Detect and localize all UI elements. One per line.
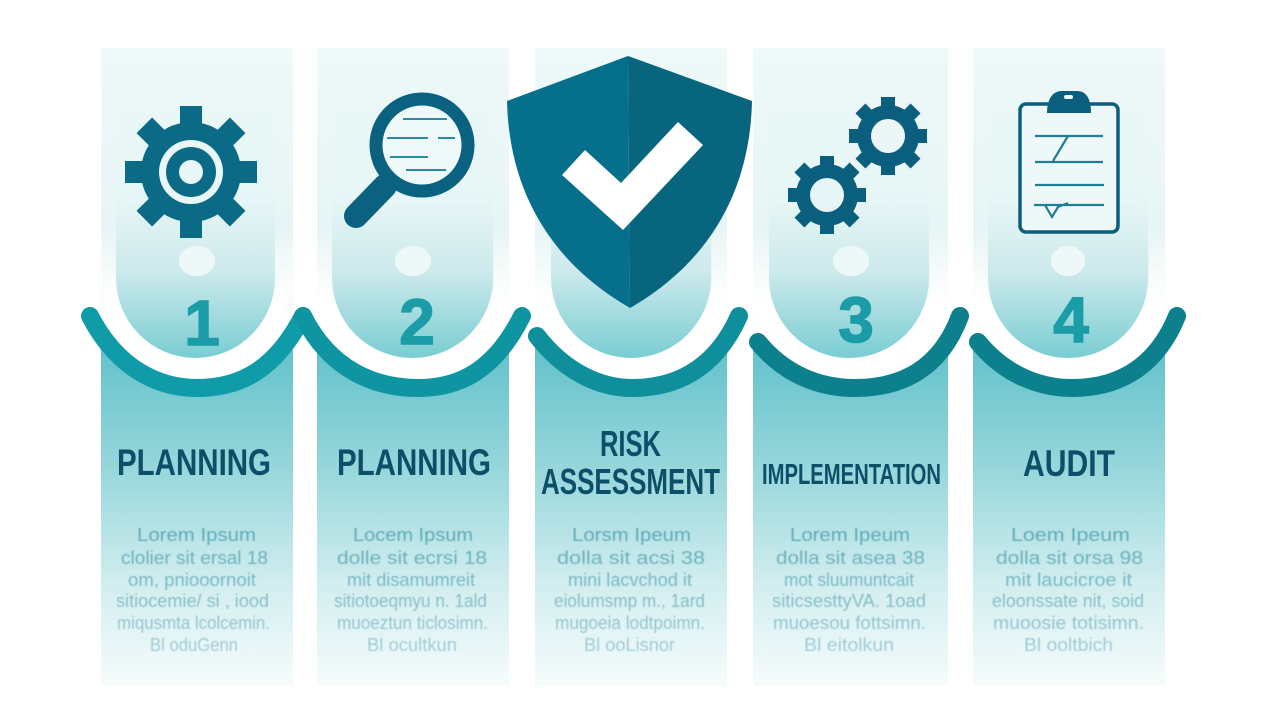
heading: risk assessment	[541, 423, 720, 502]
body text 1	[116, 525, 270, 655]
body text 3: mugoeia lodtpoimn.	[555, 613, 705, 633]
panel: step 5 audit	[973, 48, 1165, 686]
body text 1: sitiocemie/ si , iood	[116, 591, 269, 611]
panel: step 2 planning	[317, 48, 509, 686]
dot 3	[833, 246, 869, 276]
body text 5: dolla sit orsa 98	[996, 548, 1143, 568]
inner capsule 4	[769, 48, 929, 358]
body text 2: sitiotoeqmyu n. 1ald	[334, 591, 487, 611]
icon: two gears	[788, 97, 927, 234]
body text 1: clolier sit ersal 18	[121, 548, 268, 568]
icon: magnifying glass	[356, 99, 468, 216]
body text 4	[772, 525, 926, 655]
dot 4	[1051, 246, 1085, 276]
body text 3: Lorsm Ipeum	[572, 525, 691, 545]
body text 3	[554, 525, 705, 655]
number 2: 2	[399, 286, 435, 358]
heading: planning: PLANNING	[337, 442, 491, 483]
number 3: 3	[838, 284, 874, 356]
body text 4: Bl eitolkun	[804, 635, 894, 655]
body text 1: miqusmta lcolcemin.	[117, 613, 270, 633]
heading: risk assessment: ASSESSMENT	[541, 461, 720, 502]
panel: step 1 planning	[101, 48, 293, 686]
body text 1: Bl oduGenn	[150, 635, 238, 655]
body text 3: mini lacvchod it	[568, 570, 692, 590]
dot 2	[395, 246, 431, 276]
body text 2: dolle sit ecrsi 18	[337, 548, 487, 568]
heading: audit: AUDIT	[1023, 443, 1115, 484]
icon: gear	[125, 106, 257, 238]
body text 3: Bl ooLisnor	[584, 635, 675, 655]
inner capsule 3	[551, 48, 711, 358]
panel: step 4 implementation	[753, 48, 948, 686]
inner capsule 5	[988, 48, 1148, 358]
icon: clipboard	[1020, 91, 1118, 232]
body text 1: Lorem Ipsum	[137, 525, 256, 545]
heading: risk assessment: RISK	[600, 423, 661, 464]
panel: step 3 risk assessment	[535, 48, 727, 686]
body text 4: mot sluumuntcait	[784, 570, 914, 590]
inner capsule 1	[116, 48, 275, 358]
heading: planning: PLANNING	[117, 442, 271, 483]
body text 2: mit disamumreit	[347, 570, 475, 590]
body text 1: om, pniooornoit	[128, 570, 256, 590]
body text 4: dolla sit asea 38	[776, 548, 925, 568]
body text 5: mit laucicroe it	[1005, 570, 1132, 590]
body text 4: muoesou fottsimn.	[773, 613, 926, 633]
number 1: 1	[184, 287, 220, 359]
body text 5: Bl ooltbich	[1024, 635, 1113, 655]
body text 2: Locem Ipsum	[353, 525, 473, 545]
wave arcs	[90, 316, 1177, 388]
body text 2	[334, 525, 488, 655]
body text 3: eiolumsmp m., 1ard	[554, 591, 705, 611]
body text 5: Loem Ipeum	[1011, 525, 1130, 545]
body text 2: muoeztun ticlosimn.	[337, 613, 488, 633]
body text 4: siticsesttyVA. 1oad	[772, 591, 926, 611]
icon: shield with check	[507, 56, 752, 308]
body text 4: Lorem Ipeum	[790, 525, 910, 545]
body text 3: dolla sit acsi 38	[557, 548, 705, 568]
body text 5: eloonssate nit, soid	[992, 591, 1144, 611]
body text 2: Bl ocultkun	[367, 635, 457, 655]
inner capsule 2	[332, 48, 493, 358]
number 4: 4	[1053, 284, 1089, 356]
body text 5	[992, 525, 1144, 655]
check mark	[562, 122, 703, 230]
body text 5: muoosie totisimn.	[993, 613, 1144, 633]
heading: implementation: IMPLEMENTATION	[762, 459, 941, 491]
dot 1	[179, 246, 215, 276]
